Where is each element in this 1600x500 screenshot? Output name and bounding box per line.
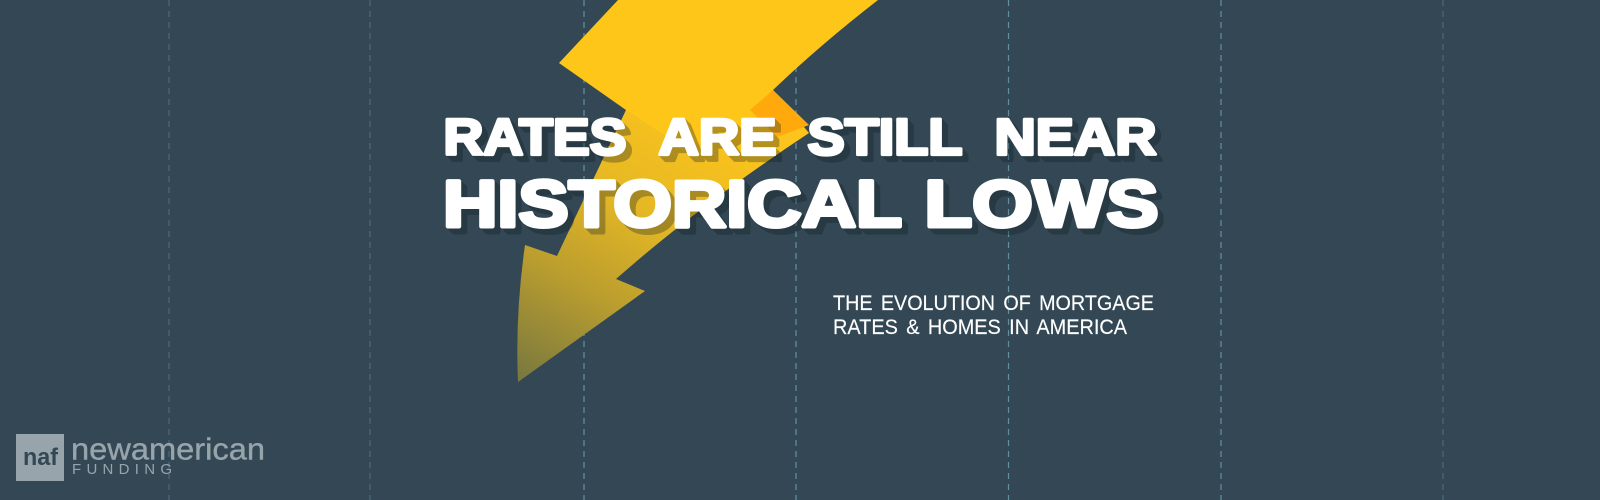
- icon: lightning bolt: [517, 0, 878, 382]
- title line 1: RATES: [444, 108, 626, 165]
- subtitle: [833, 292, 1154, 339]
- bolt upper section: [559, 0, 878, 145]
- logo subline: FUNDING: [72, 461, 172, 478]
- title line 2: LOWS: [924, 166, 1158, 240]
- title line 2: HISTORICAL: [443, 166, 902, 240]
- title line 1: [444, 108, 1156, 165]
- bolt lower fading section: [517, 80, 809, 382]
- logo square: [16, 434, 64, 481]
- bolt orange fold: [750, 90, 809, 137]
- logo: New American Funding: [16, 432, 265, 481]
- title line 1: ARE: [658, 108, 776, 165]
- title line 1: NEAR: [994, 108, 1156, 165]
- logo wordmark: newamerican: [71, 432, 265, 466]
- subtitle line 1: THE EVOLUTION OF MORTGAGE: [833, 292, 1154, 315]
- title line 2: [443, 166, 1158, 240]
- subtitle line 2: RATES & HOMES IN AMERICA: [833, 316, 1127, 339]
- logo initials: naf: [23, 444, 59, 471]
- title line 1: STILL: [808, 108, 962, 165]
- title: [443, 108, 1158, 240]
